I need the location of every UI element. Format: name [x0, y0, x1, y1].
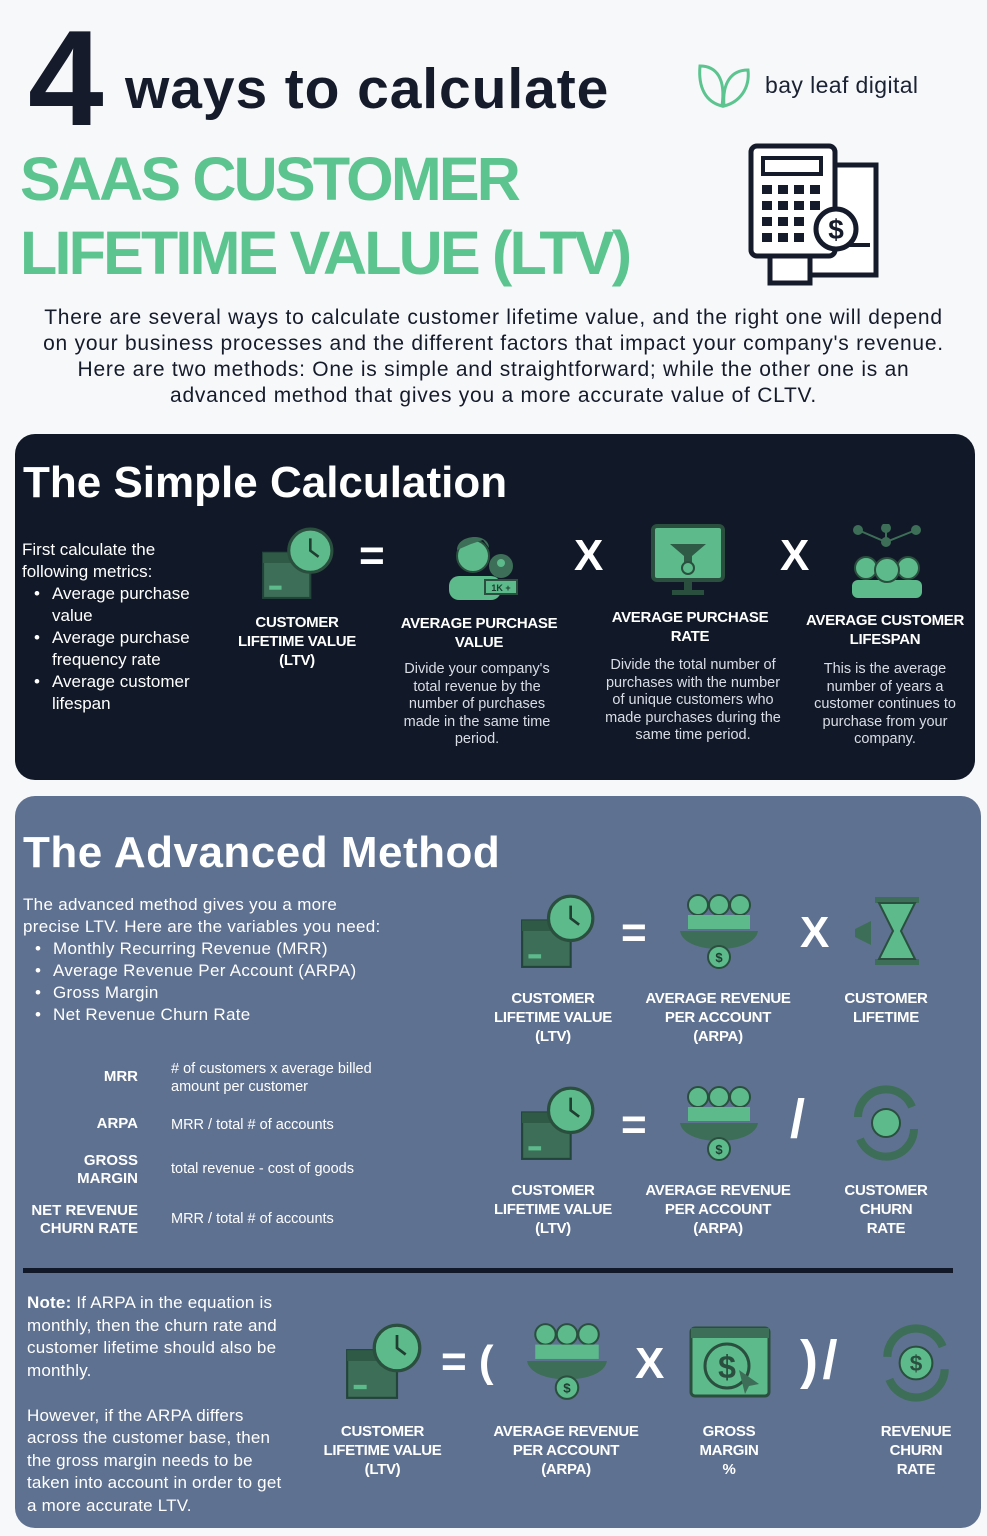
table: definitions: # of customers x average billed amount per customer: [171, 1061, 372, 1095]
table: definitions: [31, 1061, 372, 1237]
label: CLTV: CUSTOMER LIFETIME VALUE (LTV): [323, 1423, 442, 1478]
icon: people bowl: $: [563, 1381, 571, 1396]
label: average customer lifespan: AVERAGE CUSTOMER LIFESPAN: [806, 612, 964, 648]
label: CLTV: CUSTOMER LIFETIME VALUE (LTV): [494, 1182, 612, 1237]
text: metrics list: Average customer lifespan: [52, 672, 190, 713]
operator: equals: =: [359, 531, 385, 580]
logo: bay leaf digital: bay leaf digital: [765, 72, 918, 98]
note text: Note: If ARPA in the equation is monthly, then the churn rate and customer lifetime should also be monthly.: [27, 1293, 277, 1380]
icon: person 1K+: [449, 537, 518, 600]
icon: revenue churn: $: [910, 1351, 923, 1376]
icon: churn cycle: [854, 1085, 918, 1161]
formula row 3: = (: [441, 1337, 494, 1386]
formula row 1: X: [800, 908, 829, 957]
table: definitions: MRR / total # of accounts: [171, 1117, 334, 1133]
formula row 3: X: [635, 1339, 664, 1388]
logo: bay leaf digital: [698, 64, 918, 108]
icon: clock box: [262, 528, 334, 599]
heading: SAAS CUSTOMER LIFETIME VALUE (LTV): LIFETIME VALUE (LTV): [20, 219, 629, 287]
text: metrics list: [22, 540, 190, 713]
icon: clock box: [346, 1324, 422, 1399]
text: lifespan desc: This is the average number of years a customer continues to purchase from your company.: [814, 661, 956, 747]
intro paragraph: There are several ways to calculate customer lifetime value, and the right one will depend: [44, 306, 943, 329]
label: ARPA: AVERAGE REVENUE PER ACCOUNT (ARPA): [493, 1423, 639, 1478]
table: definitions: ARPA: [97, 1115, 138, 1132]
text: purchase value desc: Divide your company's total revenue by the number of purchases made in the same time period.: [404, 661, 550, 747]
formula row 1: [494, 894, 928, 1045]
icon: people bowl: [680, 1086, 758, 1161]
icon: hourglass megaphone: [855, 897, 919, 965]
label: gross margin: MARGIN: [699, 1442, 759, 1459]
title: 4 ways to calculate: ways to calculate: [125, 57, 609, 121]
heading: SAAS CUSTOMER LIFETIME VALUE (LTV): [20, 145, 629, 287]
text: variables list: Net Revenue Churn Rate: [53, 1005, 250, 1024]
intro paragraph: [43, 306, 944, 407]
table: definitions: total revenue - cost of goods: [171, 1161, 354, 1177]
text: variables list: [23, 895, 380, 1024]
panel: advanced method: [15, 796, 981, 1528]
label: average purchase value: AVERAGE PURCHASE VALUE: [401, 615, 557, 651]
label: revenue churn rate: REVENUE CHURN RATE: [881, 1423, 951, 1478]
formula row 2: /: [790, 1089, 805, 1149]
table: definitions: MARGIN: [77, 1170, 138, 1187]
formula row 2: =: [621, 1100, 647, 1149]
title: 4 ways to calculate: 4: [28, 2, 100, 154]
formula row 1: =: [621, 908, 647, 957]
text: metrics list: Average purchase value: [52, 584, 190, 625]
icon: customers group: [852, 524, 922, 598]
table: definitions: NET REVENUE: [31, 1202, 138, 1219]
label: gross margin: %: [722, 1461, 736, 1478]
icon: revenue churn: [883, 1324, 949, 1402]
note text: [27, 1293, 282, 1514]
text: purchase rate desc: Divide the total number of purchases with the number of unique customers who made purchases during the same time period.: [605, 657, 781, 743]
text: variables list: The advanced method gives you a more precise LTV. Here are the variables you need:: [23, 895, 380, 936]
label: ARPA: AVERAGE REVENUE PER ACCOUNT (ARPA): [645, 990, 791, 1045]
formula row 3: [323, 1323, 951, 1478]
heading: The Advanced Method: The Advanced Method: [23, 828, 500, 877]
text: variables list: Monthly Recurring Revenue (MRR): [53, 939, 328, 958]
icon: monitor funnel: [651, 524, 725, 595]
operator: multiply: X: [780, 531, 809, 580]
intro paragraph: on your business processes and the different factors that impact your company's revenue.: [43, 332, 944, 355]
formula row 3: ) /: [800, 1330, 838, 1390]
icon: people bowl: $: [715, 1142, 723, 1157]
label: gross margin: GROSS: [703, 1423, 755, 1440]
icon: gross margin browser: [690, 1326, 770, 1398]
label: customer lifetime: CUSTOMER LIFETIME: [844, 990, 928, 1026]
title: 4 ways to calculate: [28, 2, 609, 154]
label: CLTV: CUSTOMER LIFETIME VALUE (LTV): [494, 990, 612, 1045]
label: gross margin: [699, 1423, 759, 1478]
intro paragraph: Here are two methods: One is simple and straightforward; while the other one is an: [78, 358, 909, 381]
text: variables list: Gross Margin: [53, 983, 159, 1002]
note text: However, if the ARPA differs across the customer base, then the gross margin needs to be taken into account in order to get a more accurate LTV.: [27, 1406, 281, 1514]
label: average purchase rate: AVERAGE PURCHASE RATE: [612, 609, 768, 645]
panel: simple calculation: [15, 434, 975, 780]
operator: multiply: X: [574, 531, 603, 580]
icon: people bowl: $: [715, 950, 723, 965]
text: metrics list: First calculate the following metrics:: [22, 540, 155, 581]
table: definitions: GROSS: [84, 1152, 138, 1169]
icon: clock box: [521, 1086, 594, 1160]
icon: person 1K+: 1K +: [491, 583, 511, 593]
icon: gross margin browser: $: [718, 1349, 736, 1385]
label: churn rate: CUSTOMER CHURN RATE: [844, 1182, 928, 1237]
table: definitions: CHURN RATE: [40, 1220, 138, 1237]
label: ARPA: AVERAGE REVENUE PER ACCOUNT (ARPA): [645, 1182, 791, 1237]
formula row 2: [494, 1085, 928, 1237]
icon: calculator with dollar: [748, 144, 878, 286]
icon: people bowl: [680, 894, 758, 969]
intro paragraph: advanced method that gives you a more accurate value of CLTV.: [170, 384, 817, 407]
heading: SAAS CUSTOMER LIFETIME VALUE (LTV): SAAS CUSTOMER: [20, 145, 518, 213]
icon: clock box: [521, 894, 594, 968]
heading: The Simple Calculation: The Simple Calculation: [23, 458, 507, 507]
text: metrics list: Average purchase frequency rate: [52, 628, 190, 669]
icon: calculator with dollar: $: [828, 214, 844, 245]
icon: people bowl: [527, 1323, 607, 1400]
table: definitions: MRR: [104, 1068, 138, 1085]
table: definitions: MRR / total # of accounts: [171, 1211, 334, 1227]
label: customer lifetime value: CUSTOMER LIFETIME VALUE (LTV): [238, 614, 356, 669]
text: variables list: Average Revenue Per Account (ARPA): [53, 961, 356, 980]
